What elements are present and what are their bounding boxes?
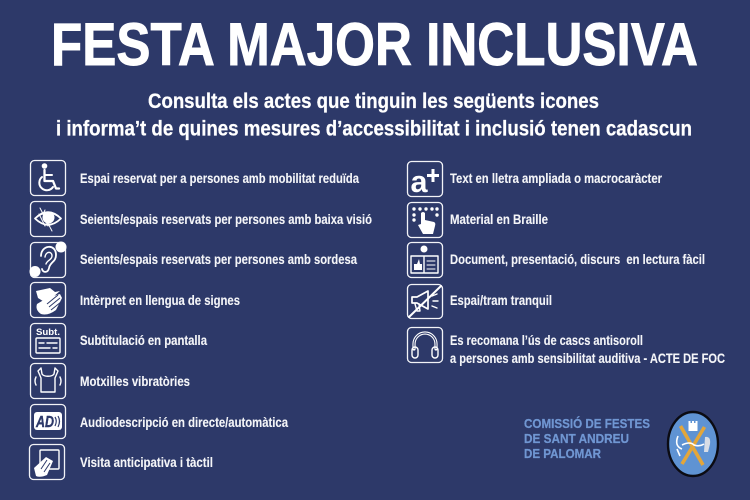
icon: large print: a	[410, 164, 428, 199]
organiser name	[524, 416, 650, 461]
subtitle: Consulta els actes que tinguin les següents icones	[148, 90, 599, 113]
icon: wheelchair	[30, 160, 66, 196]
label: hearing protection	[450, 332, 725, 366]
label: large print: Text en lletra ampliada o macrocaràcter	[450, 170, 662, 186]
subtitle	[56, 90, 692, 140]
label: braille: Material en Braille	[450, 211, 548, 227]
label: tactile visit: Visita anticipativa i tàctil	[80, 454, 213, 470]
icon: ear	[30, 242, 66, 278]
subtitle: i informa’t de quines mesures d’accessibilitat i inclusió tenen cadascun	[56, 118, 692, 140]
label: audio description: Audiodescripció en directe/automàtica	[80, 414, 288, 430]
logo: crest	[668, 412, 718, 476]
icon: subtitles	[30, 324, 66, 358]
icon: vibrating backpack	[30, 364, 66, 398]
label: vibrating backpacks: Motxilles vibratòries	[80, 373, 190, 389]
icon: easy reading	[408, 242, 442, 278]
organiser name: COMISSIÓ DE FESTES	[524, 416, 650, 431]
panel: left list	[30, 160, 372, 480]
label: subtitles: Subtitulació en pantalla	[80, 332, 207, 348]
label: mobility: Espai reservat per a persones amb mobilitat reduïda	[80, 170, 359, 186]
icon: audio description	[30, 404, 66, 438]
icon: braille	[408, 202, 442, 238]
label: sign language: Intèrpret en llengua de signes	[80, 292, 240, 308]
label: low vision: Seients/espais reservats per persones amb baixa visió	[80, 211, 372, 227]
icon: tactile visit	[30, 444, 64, 480]
icon: headphones	[408, 328, 442, 362]
icon: audio description: AD	[35, 414, 54, 431]
icon: subtitles: Subt.	[36, 327, 60, 338]
icon: sign language hands	[30, 282, 66, 318]
organiser name: DE SANT ANDREU	[524, 431, 629, 446]
label: deafness: Seients/espais reservats per persones amb sordesa	[80, 251, 357, 267]
label: quiet space: Espai/tram tranquil	[450, 292, 552, 308]
panel: right list	[408, 162, 725, 366]
icon: quiet space	[408, 284, 442, 318]
icon: low vision eye	[30, 202, 66, 236]
organiser name: DE PALOMAR	[524, 446, 602, 461]
label: hearing protection: Es recomana l’ús de cascs antisoroll	[450, 332, 643, 348]
icon: large print	[408, 162, 442, 199]
